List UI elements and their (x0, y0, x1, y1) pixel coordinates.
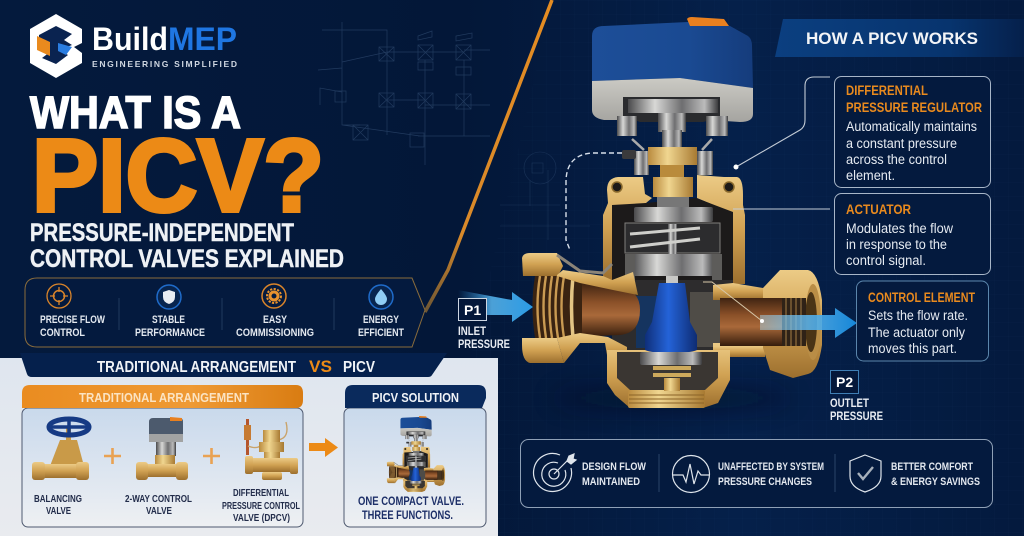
label: inlet pressure: INLET (458, 326, 486, 338)
icon: stable shield (157, 285, 181, 309)
label: DPCV: PRESSURE CONTROL (222, 500, 300, 512)
label: unaffected: UNAFFECTED BY SYSTEM (718, 461, 824, 473)
description: in response to the (846, 237, 947, 252)
leader: control element (703, 282, 764, 323)
heading: DIFFERENTIAL (846, 83, 928, 98)
label: better comfort (891, 461, 980, 488)
label: balancing valve: BALANCING (34, 493, 82, 505)
logo mark (30, 14, 82, 78)
label: unaffected (718, 461, 824, 488)
description: Sets the flow rate. (868, 308, 968, 323)
arrow: outlet flow (760, 308, 857, 338)
label: easy commissioning (236, 314, 314, 339)
valve drop shadow (552, 386, 792, 410)
heading: how a PICV works: HOW A PICV WORKS (806, 29, 978, 48)
icon: pulse (672, 456, 710, 492)
label: 2-way control valve (125, 493, 192, 517)
description: Automatically maintains (846, 119, 977, 134)
panel: PICV solution (344, 385, 486, 527)
traditional header text: TRADITIONAL ARRANGEMENT (79, 391, 249, 405)
icon: precise flow target (47, 284, 71, 308)
brand name: Build (92, 21, 168, 57)
label: stable performance: STABLE (152, 314, 185, 326)
banner left text: TRADITIONAL ARRANGEMENT (97, 359, 296, 376)
description: control signal. (846, 253, 926, 268)
heading (846, 83, 982, 115)
label: energy efficient: EFFICIENT (358, 327, 404, 339)
blueprint grid (430, 0, 1024, 536)
label: inlet pressure: PRESSURE (458, 339, 510, 351)
panel: differential pressure regulator (834, 76, 990, 188)
banner right text: PICV (343, 359, 376, 376)
icon: compact PICV (387, 416, 445, 492)
label: energy efficient: ENERGY (363, 314, 400, 326)
label: P1 (458, 298, 486, 320)
label: DPCV: VALVE (DPCV) (233, 512, 290, 524)
description: moves this part. (868, 341, 957, 356)
label: design flow (582, 461, 647, 488)
icon: balancing valve (32, 419, 89, 480)
description: across the control (846, 152, 947, 167)
label: design flow: MAINTAINED (582, 476, 640, 488)
label: P2 (830, 370, 858, 394)
label: better comfort: & ENERGY SAVINGS (891, 476, 980, 488)
icon: DPCV valve (244, 419, 298, 480)
icon: energy drop (369, 285, 393, 309)
title line 1: WHAT IS A (30, 87, 241, 138)
label: outlet pressure: PRESSURE (830, 411, 883, 423)
small blueprint detail (500, 152, 590, 240)
label: DPCV: DIFFERENTIAL (233, 487, 289, 499)
label: balancing valve: VALVE (46, 505, 71, 517)
label: outlet pressure (830, 398, 883, 423)
subtitle line 2: CONTROL VALVES EXPLAINED (30, 245, 344, 273)
label: precise flow control: PRECISE FLOW (40, 314, 105, 326)
plus sign (104, 448, 121, 464)
panel: outcomes (520, 440, 992, 508)
label: precise flow control (40, 314, 105, 339)
panel: control element (856, 281, 988, 361)
label: energy efficient (358, 314, 404, 339)
label: precise flow control: CONTROL (40, 327, 85, 339)
label: 2-way control valve: 2-WAY CONTROL (125, 493, 192, 505)
heading: ACTUATOR (846, 202, 911, 217)
icon: target (534, 453, 576, 491)
arrow: inlet flow (458, 290, 533, 322)
pressure sensing dashed line (566, 153, 622, 250)
label: better comfort: BETTER COMFORT (891, 461, 973, 473)
description: a constant pressure (846, 136, 957, 151)
comparison banner (20, 353, 447, 377)
panel: traditional arrangement (22, 385, 303, 527)
blueprint sketch (318, 22, 490, 165)
arrow: traditional to PICV (309, 438, 338, 457)
description: Modulates the flow (846, 221, 953, 236)
title PICV: PICV? (32, 118, 324, 233)
label: inlet pressure (458, 326, 510, 351)
panel: comparison background (0, 358, 498, 536)
plus sign (203, 448, 220, 464)
label: design flow: DESIGN FLOW (582, 461, 647, 473)
description (868, 308, 968, 356)
label: stable performance (135, 314, 205, 339)
tagline: ENGINEERING SIMPLIFIED (92, 59, 237, 69)
PICV header text: PICV SOLUTION (372, 391, 459, 405)
label: P1: P1 (464, 302, 481, 318)
panel: benefits (25, 278, 425, 347)
icon: commissioning gear (262, 284, 286, 308)
label: stable performance: PERFORMANCE (135, 327, 205, 339)
panel: actuator (834, 194, 990, 274)
title (30, 87, 344, 273)
description (846, 221, 953, 268)
heading: CONTROL ELEMENT (868, 290, 976, 305)
label: unaffected: PRESSURE CHANGES (718, 476, 812, 488)
description: element. (846, 168, 895, 183)
label: 2-way control valve: VALVE (146, 505, 172, 517)
heading: PRESSURE REGULATOR (846, 100, 982, 115)
heading: how a PICV works (775, 19, 1024, 57)
orange diagonal divider (425, 0, 552, 312)
label: easy commissioning: COMMISSIONING (236, 327, 314, 339)
banner VS: VS (309, 357, 332, 376)
label: P2: P2 (836, 374, 853, 390)
label: easy commissioning: EASY (263, 314, 288, 326)
subtitle line 1: PRESSURE-INDEPENDENT (30, 219, 294, 247)
description: The actuator only (868, 325, 965, 340)
icon: 2-way control valve (136, 417, 188, 480)
label: balancing valve (34, 493, 82, 517)
icon: main PICV cutaway valve (522, 17, 822, 408)
label: outlet pressure: OUTLET (830, 398, 869, 410)
description (846, 119, 977, 183)
icon: shield check (850, 455, 881, 492)
PICV caption: ONE COMPACT VALVE. (358, 494, 464, 508)
label: DPCV (222, 487, 300, 524)
logo (30, 14, 237, 78)
brand name accent: MEP (168, 21, 237, 57)
leader: actuator (733, 208, 830, 210)
leader: differential pressure regulator (734, 77, 830, 170)
PICV caption (358, 494, 464, 522)
PICV caption: THREE FUNCTIONS. (362, 508, 453, 522)
